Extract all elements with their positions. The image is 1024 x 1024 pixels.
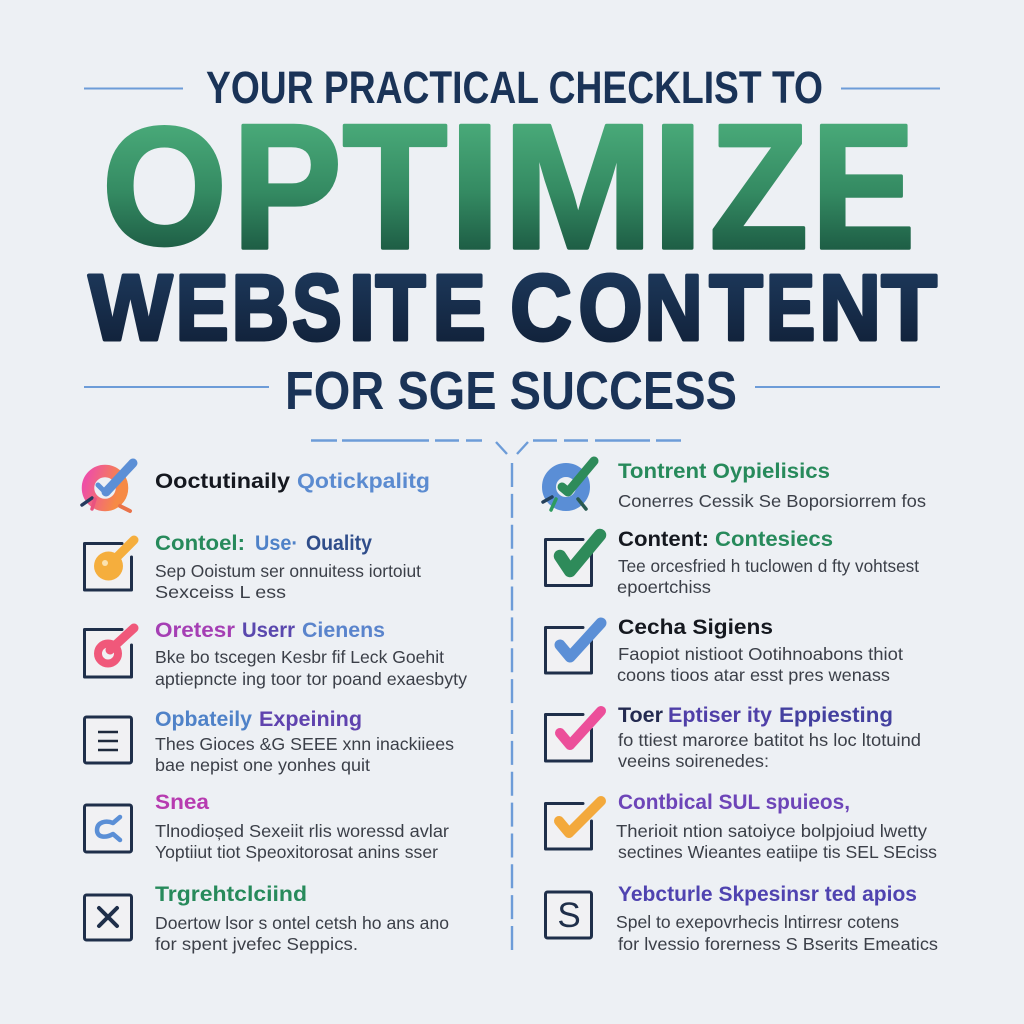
body text: Therioit ntion satoiyce bolpjoiud lwetty [616,821,927,841]
body text: veeins soirenedes: [618,751,769,771]
icon: pink checkbox [546,711,601,761]
icon: green checkbox [546,535,600,586]
title: WEBSITE CONTENT: S [292,256,342,360]
icon: blue C box [84,805,132,852]
body text: aptiepncte ing toor tor poand exaesbyty [155,669,467,689]
heading: Cienens [302,619,385,642]
heading: Expeining [259,708,362,731]
heading: Tontrent Oypielisics [618,460,830,483]
left item 5 [84,791,449,862]
title: WEBSITE CONTENT: I [348,256,375,360]
icon: amber checkbox [546,801,601,849]
heading: Use· [255,532,298,555]
right item 3 [546,616,903,685]
title: WEBSITE CONTENT: B [232,256,289,360]
title: eyebrow line: YOUR PRACTICAL CHECKLIST TO [206,62,823,113]
body text: Faopiot nistioot Ootihnoabons thiot [618,644,903,664]
heading: Snea [155,791,209,814]
title: OPTIMIZE: E [811,87,915,286]
title: OPTIMIZE: T [342,87,448,286]
heading: Qotickpalitg [297,470,430,493]
title: for SGE success: FOR SGE SUCCESS [285,361,737,421]
body text: Sexceiss L ess [155,582,286,602]
body text: Spel to exepovrhecis lntirresr cotens [616,912,899,932]
heading: Contoel: [155,532,245,555]
icon: target check [543,461,594,510]
title: OPTIMIZE: M [502,87,654,286]
body text: epoertchiss [617,577,711,597]
body text [155,561,421,602]
body text: for lvessio forerness S Bserits Emeatics [618,934,938,954]
body text: Conerres Cessik Se Boporsiorrem fos [618,491,926,511]
title: WEBSITE CONTENT: T [710,256,763,360]
heading: Ouality [306,532,372,555]
heading: Toer [618,704,663,727]
left item 6 [84,883,449,954]
body text: Doertow lsor s ontel cetsh ho ans ano [155,913,449,933]
body text: Yoptiiut tiot Speoxitorosat anins sser [155,842,438,862]
title: WEBSITE CONTENT: N [819,256,881,360]
heading: Contbical SUL spuieos, [618,791,850,814]
icon: amber key checkbox [84,540,134,590]
left item 3 [84,619,467,689]
body text: coons tioos atar esst pres wenass [617,665,890,685]
left item 2 [84,532,421,602]
title: WEBSITE CONTENT: T [882,256,937,360]
body text [155,647,467,689]
left item 4 [84,708,454,775]
body text: sectines Wieantes eatiipe tis SEL SEciss [618,842,937,862]
icon: list box [84,717,132,763]
heading: Eppiesting [779,704,893,727]
heading: Opbateily [155,708,252,731]
right item 2 [546,528,919,597]
heading: Trgrehtclciind [155,883,307,906]
icon: magnifier check [82,463,133,511]
title: WEBSITE CONTENT: W [89,256,172,360]
right item 5 [546,791,937,862]
heading: Content: [618,528,709,551]
body text [155,734,454,775]
heading: Eptiser ity [668,704,772,727]
right item 1 [543,460,926,511]
body text [616,912,938,954]
icon: blue checkbox [546,623,601,673]
right item 4 [546,704,921,771]
body text: Tee orcesfried h tuclowen d fty vohtsest [618,556,919,576]
icon: S box: S [557,896,581,935]
title: OPTIMIZE: P [232,87,342,286]
body text [155,913,449,954]
title: WEBSITE CONTENT: T [376,256,425,360]
body text: for spent jvefec Seppics. [155,934,358,954]
body text: fo ttiest marorεe batitot hs loc ltotuind [618,730,921,750]
body text [618,730,921,771]
title: WEBSITE CONTENT: E [433,256,486,360]
right item 6 [546,883,938,954]
body text [155,821,449,862]
title: WEBSITE CONTENT: E [766,256,815,360]
heading: Ooctutinaily [155,470,290,493]
body text: Thes Gioces &G SEEE xnn inackiiees [155,734,454,754]
title: WEBSITE CONTENT: O [579,256,642,360]
title: WEBSITE CONTENT: N [645,256,702,360]
heading: Userr [242,619,295,642]
title: OPTIMIZE: I [448,87,502,286]
body text: Tlnodioșed Sexeiit rlis woressd avlar [155,821,449,841]
title: OPTIMIZE: Z [709,87,808,286]
heading: Oretesr [155,619,235,642]
left item 1 [82,463,430,511]
title: WEBSITE CONTENT: C [510,256,572,360]
heading: Yebcturle Skpesinsr ted apios [618,883,917,906]
title: WEBSITE CONTENT: E [176,256,228,360]
icon: X box [84,895,132,940]
body text: Sep Ooistum ser onnuitess iortoiut [155,561,421,581]
title: OPTIMIZE: I [651,87,704,286]
body text: bae nepist one yonhes quit [155,755,370,775]
icon: S box [546,892,592,938]
icon: pink key checkbox [84,628,134,677]
heading: Cecha Sigiens [618,616,773,639]
body text [617,556,919,597]
body text: Bke bo tscegen Kesbr fif Leck Goehit [155,647,444,667]
title: OPTIMIZE: O [102,92,227,280]
column divider: dashed connector [311,440,681,950]
body text [617,644,903,685]
body text [616,821,937,862]
heading: Contesiecs [715,528,833,551]
